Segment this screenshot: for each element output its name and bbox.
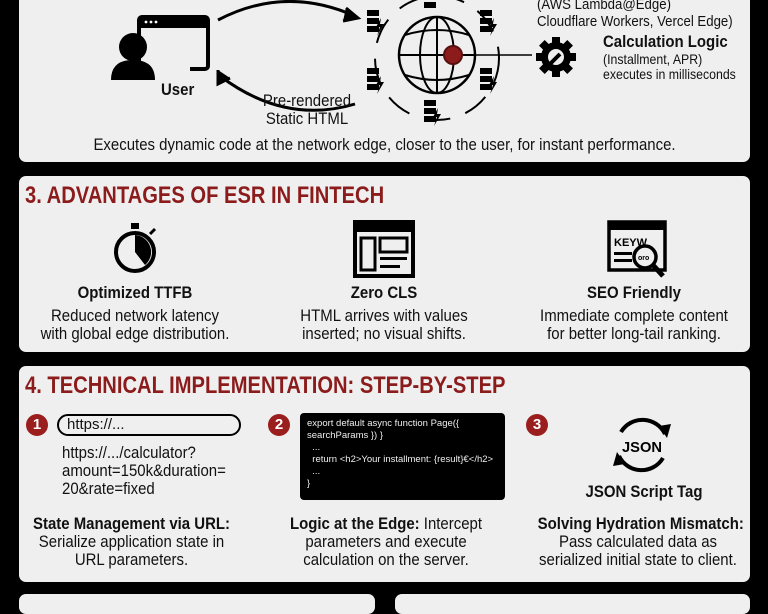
label: pre-rendered: Pre-rendered	[263, 91, 351, 110]
step 1 text: Serialize application state in	[39, 532, 224, 551]
step 2 text: Logic at the Edge: Intercept	[290, 514, 482, 533]
label: pre-rendered: Static HTML	[266, 109, 348, 128]
panel: bottom right	[395, 594, 750, 614]
step 3 text: Solving Hydration Mismatch:	[538, 514, 744, 533]
feature: CLS: HTML arrives with values	[300, 306, 468, 325]
label: calculation logic	[603, 32, 736, 82]
label: pre-rendered	[263, 91, 351, 128]
panel: technical implementation	[19, 366, 750, 582]
label: user: User	[161, 80, 194, 99]
globe with edge servers	[367, 0, 532, 126]
step 1 text: State Management via URL:	[33, 514, 230, 533]
heading: 4. TECHNICAL IMPLEMENTATION: STEP-BY-STEP	[25, 372, 506, 399]
step 2 text	[290, 514, 482, 569]
step 3 text: serialized initial state to client.	[539, 550, 737, 569]
label: providers: Cloudflare Workers, Vercel Edge)	[537, 13, 733, 30]
url example: amount=150k&duration=	[62, 461, 226, 480]
feature: TTFB: with global edge distribution.	[41, 324, 229, 343]
step 1 text	[33, 514, 230, 569]
feature: TTFB: Optimized TTFB	[78, 283, 192, 302]
icon: stopwatch	[114, 223, 156, 273]
feature: CLS: inserted; no visual shifts.	[302, 324, 466, 343]
diagram svg	[111, 0, 576, 126]
label: calculation logic: Calculation Logic	[603, 32, 728, 51]
icon: json cycle: JSON	[622, 439, 662, 456]
step 3 badge	[526, 414, 548, 436]
json label: JSON Script Tag	[586, 482, 702, 501]
url bar: https://...	[67, 416, 125, 433]
feature: SEO: for better long-tail ranking.	[547, 324, 721, 343]
step 2 badge	[268, 414, 290, 436]
heading: 3. ADVANTAGES OF ESR IN FINTECH	[25, 182, 384, 209]
panel: edge architecture	[19, 0, 750, 162]
caption: Executes dynamic code at the network edge, closer to the user, for instant performance.	[93, 135, 676, 154]
step 3 text: Pass calculated data as	[559, 532, 717, 551]
url bar	[57, 414, 241, 436]
label: calculation logic: executes in milliseconds	[603, 66, 736, 82]
feature: SEO	[540, 283, 728, 343]
icon: seo search: KEYW	[614, 237, 648, 249]
step 3 text	[538, 514, 744, 569]
label: providers	[537, 0, 733, 30]
feature: CLS: Zero CLS	[351, 283, 417, 302]
feature: SEO: Immediate complete content	[540, 306, 728, 325]
panel: advantages	[19, 176, 750, 352]
icon: json cycle	[613, 418, 671, 472]
icon: layout window	[353, 220, 415, 278]
url example: https://.../calculator?	[62, 443, 196, 462]
feature: TTFB	[40, 283, 229, 343]
arrow: request to edge	[218, 1, 358, 21]
icon: gear	[536, 37, 576, 77]
step 2 badge: 2	[275, 416, 283, 433]
feature: SEO: SEO Friendly	[587, 283, 681, 302]
icon: seo search	[607, 220, 667, 278]
step 2 text: calculation on the server.	[303, 550, 469, 569]
url example: 20&rate=fixed	[62, 479, 155, 498]
step 1 text: URL parameters.	[75, 550, 188, 569]
feature: TTFB: Reduced network latency	[51, 306, 219, 325]
step 3 badge: 3	[533, 416, 541, 433]
arrow: response to user	[218, 70, 355, 110]
step 1 badge	[26, 414, 48, 436]
step 1 badge: 1	[33, 416, 41, 433]
feature: CLS	[300, 283, 468, 343]
icon: user	[111, 17, 208, 80]
icon: seo search: oro	[638, 255, 649, 262]
step 2 text: parameters and execute	[305, 532, 467, 551]
panel: bottom left	[19, 594, 375, 614]
code block: export default async function Page({ searchParams }) } ... return <h2>Your installment: {result}€</h2> ... }	[307, 418, 493, 489]
label: calculation logic: (Installment, APR)	[603, 51, 702, 67]
url example	[62, 443, 226, 498]
